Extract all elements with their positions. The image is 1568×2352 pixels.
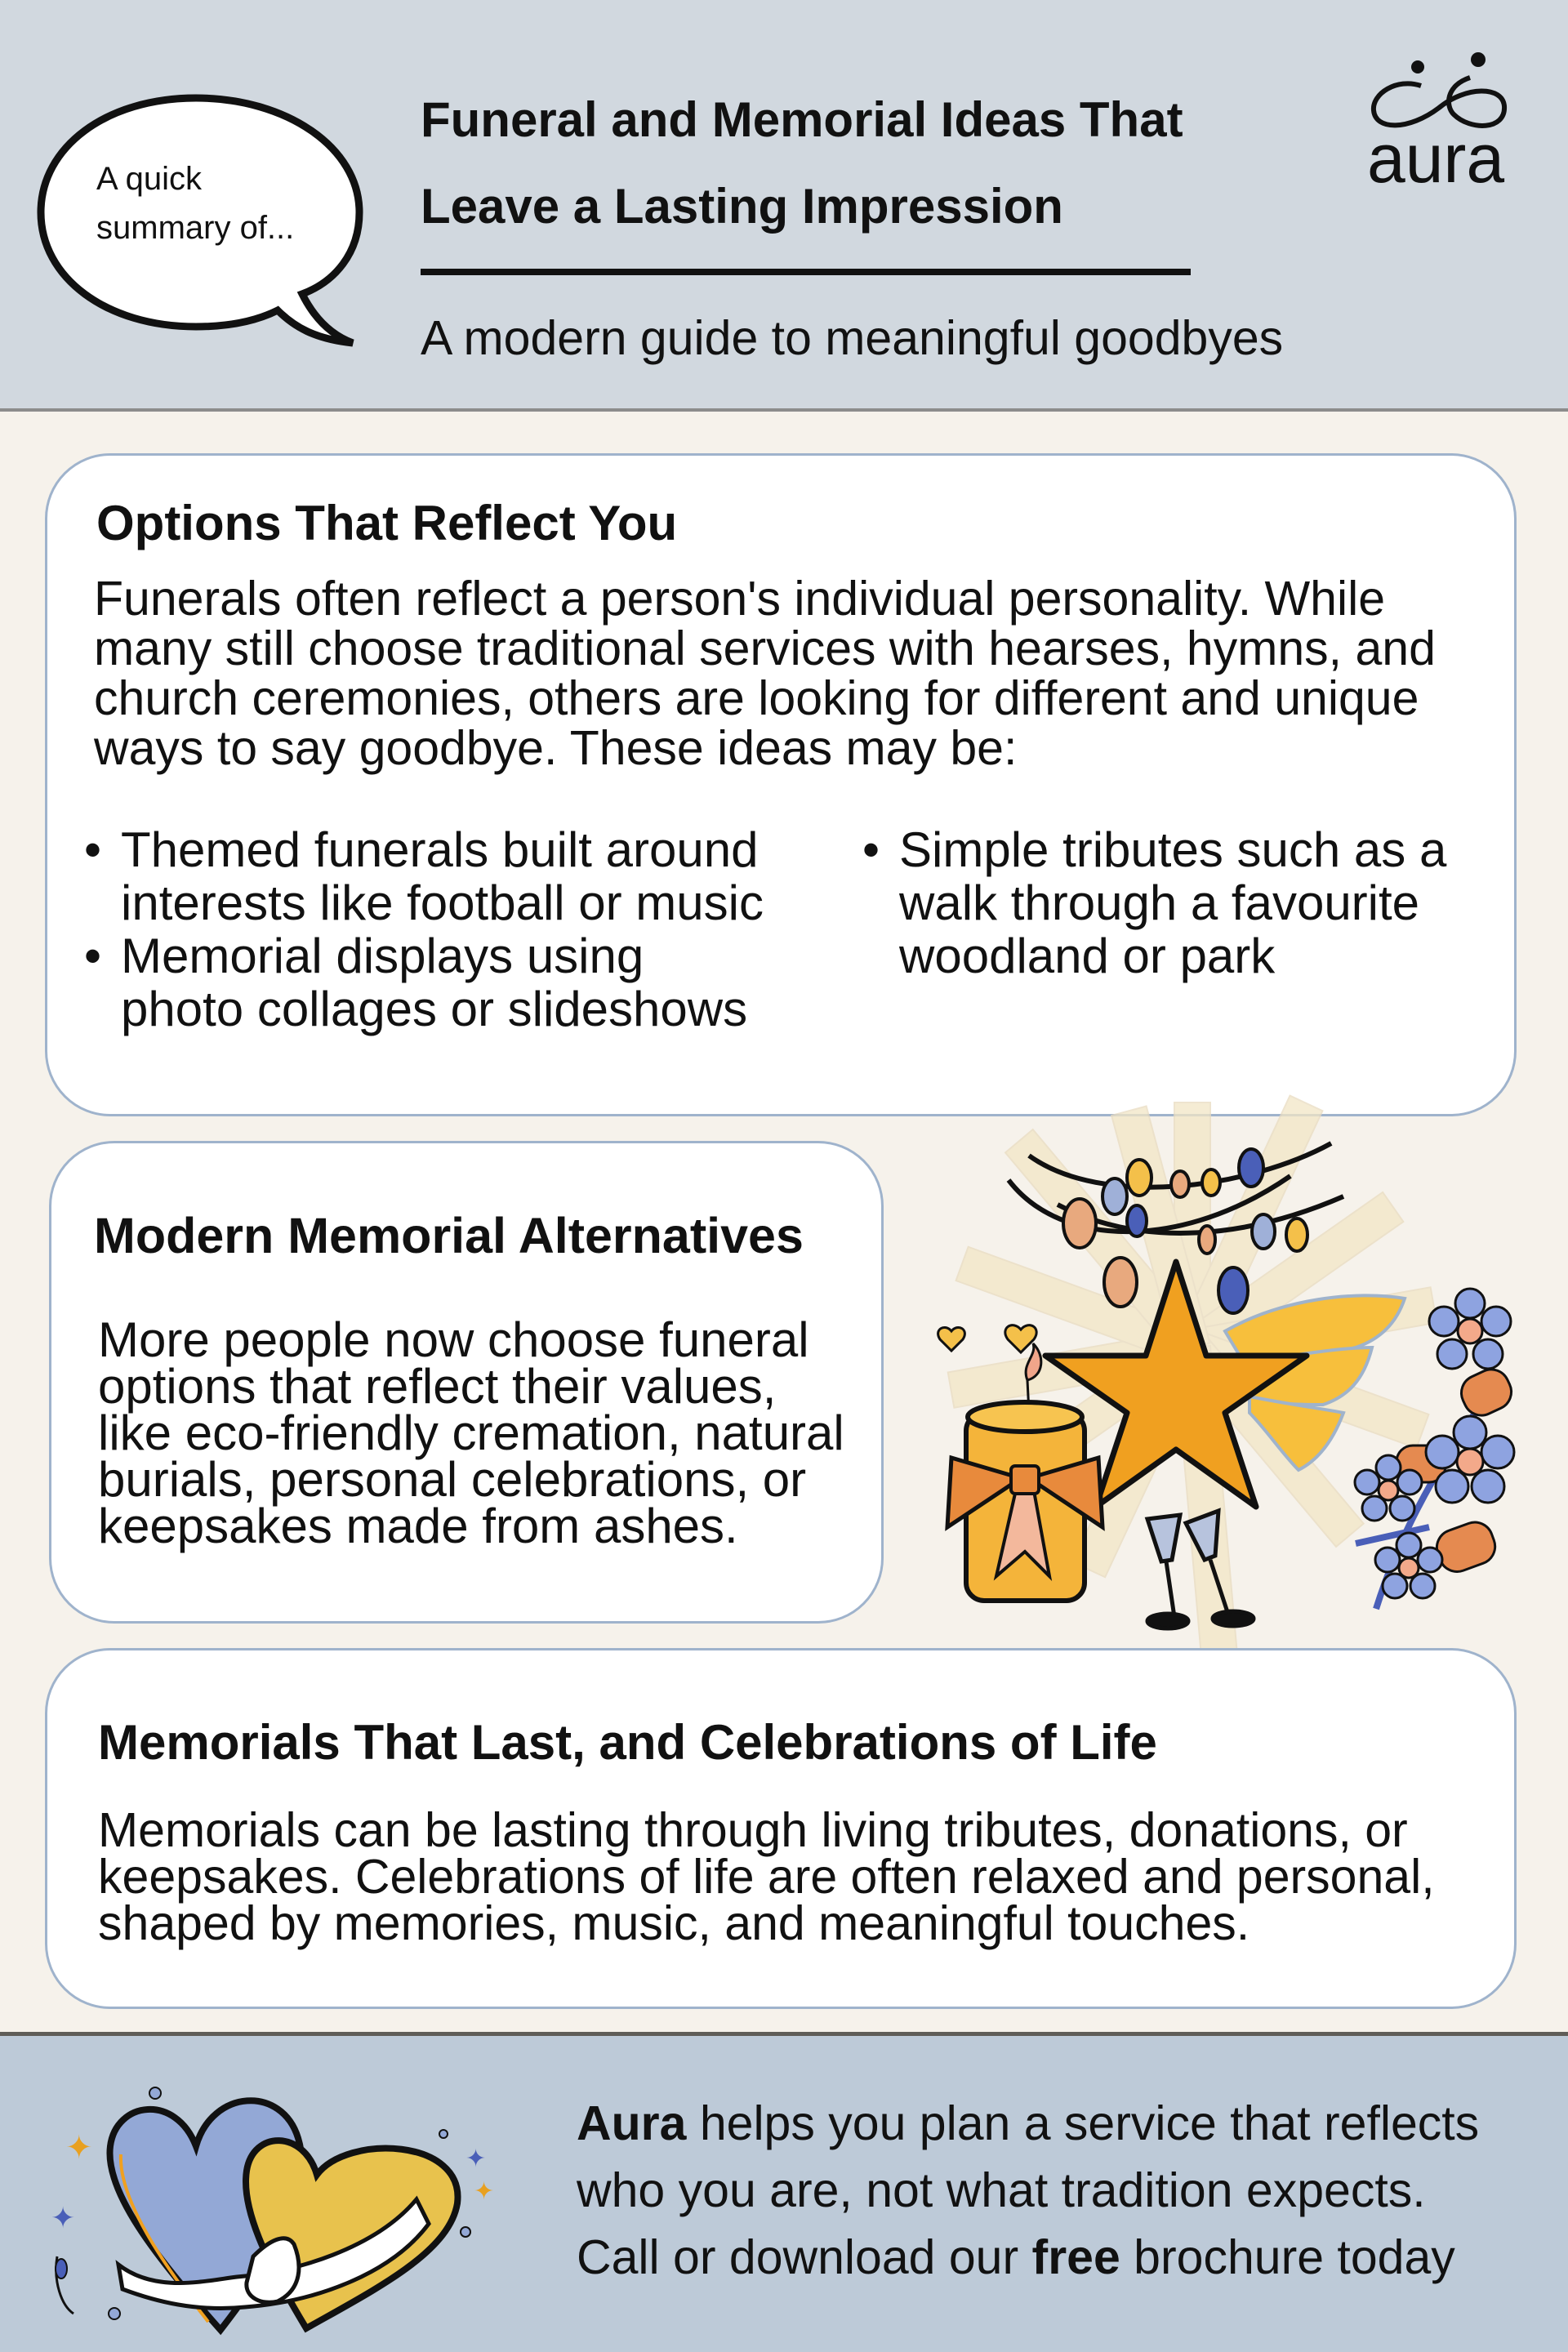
call to action text: Call or download our free brochure today: [577, 2230, 1455, 2284]
title: Funeral and Memorial Ideas That: [421, 92, 1183, 147]
bullet list right: Simple tributes such as a: [899, 822, 1446, 877]
title: Leave a Lasting Impression: [421, 179, 1063, 234]
bullet list right: [864, 822, 1447, 983]
ribbon wings: [1225, 1295, 1405, 1470]
star: [1045, 1262, 1307, 1507]
paragraph: [98, 1312, 844, 1553]
speech bubble: [38, 95, 363, 346]
illustration: celebration star, lights, candle, glasses, flowers: [937, 1094, 1516, 1648]
bullet list left: Memorial displays using: [121, 929, 644, 983]
paragraph: shaped by memories, music, and meaningful touches.: [98, 1896, 1250, 1950]
bullet list right: woodland or park: [899, 929, 1275, 983]
candle with bow: [947, 1343, 1102, 1601]
title rule: [421, 269, 1191, 275]
icon: hugging hearts: [51, 2087, 494, 2336]
paragraph: keepsakes made from ashes.: [98, 1499, 738, 1553]
panel: memorials that last: [45, 1648, 1517, 2009]
champagne glasses: [1147, 1511, 1254, 1628]
heading: Options That Reflect You: [96, 496, 677, 550]
paragraph: Funerals often reflect a person's individual personality. While: [94, 572, 1385, 626]
paragraph: options that reflect their values,: [98, 1359, 776, 1414]
bullet list right: walk through a favourite: [899, 875, 1419, 930]
call to action text: who you are, not what tradition expects.: [577, 2163, 1426, 2217]
logo: aura: aura: [1367, 120, 1504, 197]
paragraph: Memorials can be lasting through living tributes, donations, or: [98, 1803, 1408, 1857]
bullet list left: [86, 822, 764, 1036]
heading: Memorials That Last, and Celebrations of Life: [98, 1715, 1157, 1770]
subtitle: A modern guide to meaningful goodbyes: [421, 311, 1283, 365]
icon: hugging hearts: ✦: [51, 2202, 75, 2235]
call to action text: [577, 2096, 1479, 2284]
header band: [0, 0, 1568, 412]
paragraph: church ceremonies, others are looking for different and unique: [94, 671, 1419, 725]
flower bouquet: [1355, 1289, 1517, 1609]
bullet list left: interests like football or music: [121, 875, 764, 930]
call to action text: Aura helps you plan a service that reflects: [577, 2096, 1479, 2150]
footer band: [0, 2032, 1568, 2352]
sunburst rays: [948, 1096, 1437, 1666]
title: [421, 92, 1183, 234]
string lights: [1009, 1143, 1343, 1233]
bullet list left: photo collages or slideshows: [121, 982, 747, 1036]
paragraph: [98, 1803, 1435, 1950]
hearts: [938, 1327, 964, 1351]
paragraph: ways to say goodbye. These ideas may be:: [94, 721, 1017, 775]
paragraph: many still choose traditional services with hearses, hymns, and: [94, 621, 1436, 675]
bubble text: A quick: [96, 161, 203, 197]
paragraph: [93, 572, 1436, 775]
panel: options that reflect you: [45, 453, 1517, 1116]
paragraph: keepsakes. Celebrations of life are often relaxed and personal,: [98, 1850, 1435, 1904]
panel: modern memorial alternatives: [49, 1141, 884, 1624]
paragraph: burials, personal celebrations, or: [98, 1452, 806, 1507]
paragraph: More people now choose funeral: [98, 1312, 809, 1367]
paragraph: like eco-friendly cremation, natural: [98, 1405, 844, 1460]
logo: aura: [1367, 52, 1508, 197]
speech bubble: summary of...: [96, 210, 294, 246]
icon: hugging hearts: ✦: [65, 2129, 93, 2167]
icon: hugging hearts: ✦: [474, 2177, 494, 2206]
icon: hugging hearts: ✦: [466, 2145, 486, 2173]
bullet list left: Themed funerals built around: [121, 822, 758, 877]
heading: Modern Memorial Alternatives: [94, 1208, 804, 1263]
